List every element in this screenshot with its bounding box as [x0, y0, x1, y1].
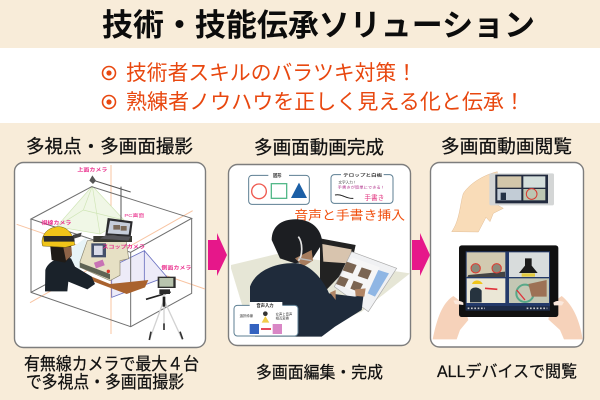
icon: laptop	[100, 218, 133, 241]
inset: text and handwriting	[331, 171, 393, 203]
diagram: scope camera cone	[63, 237, 87, 270]
desk	[75, 271, 148, 294]
icon: bullet one	[102, 66, 116, 80]
label: gaze camera: 視線カメラ	[41, 220, 71, 227]
caption: step 3: ALLデバイスで閲覧	[437, 361, 577, 381]
icon: bullet two	[102, 96, 116, 108]
inset: text and handwriting: テロップと白板	[343, 171, 382, 177]
point: know-how transfer: 熟練者ノウハウを正しく見える化と伝承！	[126, 91, 525, 114]
camera labels	[41, 166, 191, 272]
table background	[231, 254, 410, 337]
panel: video completion	[228, 164, 410, 346]
panel: key points	[0, 48, 600, 123]
inset: voice input: 相互変換	[276, 316, 290, 321]
label: scope camera: スコップカメラ	[102, 244, 145, 251]
inset: shapes: 図形	[273, 172, 282, 179]
arrow: step 2 to 3	[412, 233, 430, 276]
inset: shapes	[249, 172, 309, 204]
inset: text and handwriting: 手書きが簡単にできる！	[338, 185, 385, 190]
icon: hands holding tablet	[433, 245, 583, 339]
label: PC screen: PC画面	[124, 213, 144, 219]
inset: text and handwriting: 手書き	[364, 193, 384, 202]
icon: man with headset	[250, 219, 366, 337]
callout: audio and handwriting: 音声と手書き挿入	[294, 207, 405, 222]
panel: multi-view shooting	[14, 162, 206, 348]
diagram: orange axes	[17, 165, 205, 334]
icon: control panel machine	[80, 236, 132, 281]
inset: text and handwriting: 文字入力！	[338, 179, 357, 184]
caption: step 1: 有無線カメラで最大４台	[24, 354, 199, 374]
icon: tablet with storyboard	[334, 252, 397, 312]
diagram: side camera view cone	[112, 251, 167, 297]
icon: hand holding smartphone	[452, 172, 554, 232]
panel: viewing	[430, 162, 584, 347]
point: skill variance: 技術者スキルのバラツキ対策！	[126, 62, 417, 85]
caption: step 1: で多視点・多画面撮影	[26, 372, 184, 392]
title: 技術・技能伝承ソリューション	[102, 8, 535, 43]
diagram: top camera view cone	[57, 186, 124, 234]
label: top camera: 上面カメラ	[77, 166, 107, 173]
caption: step 1	[24, 354, 199, 392]
icon: worker with helmet	[42, 227, 95, 291]
arrow: step 1 to 2	[208, 233, 227, 276]
caption: step 2: 多画面編集・完成	[256, 363, 383, 382]
diagram: wire box	[31, 187, 192, 327]
icon: ceiling camera on boom	[89, 175, 131, 230]
label: side camera: 側面カメラ	[161, 265, 191, 272]
inset: voice input: 選択枠線	[240, 313, 254, 318]
inset: voice input: 音声入力	[256, 302, 274, 309]
inset: voice input: 女声と音声	[276, 311, 293, 316]
heading: step 1: 多視点・多画面撮影	[26, 136, 193, 157]
heading: step 3: 多画面動画閲覧	[441, 136, 572, 157]
icon: laptop screen	[320, 238, 356, 297]
heading: step 2: 多画面動画完成	[254, 137, 384, 158]
inset: voice input	[234, 302, 298, 336]
icon: smartphone on tripod	[146, 277, 183, 340]
